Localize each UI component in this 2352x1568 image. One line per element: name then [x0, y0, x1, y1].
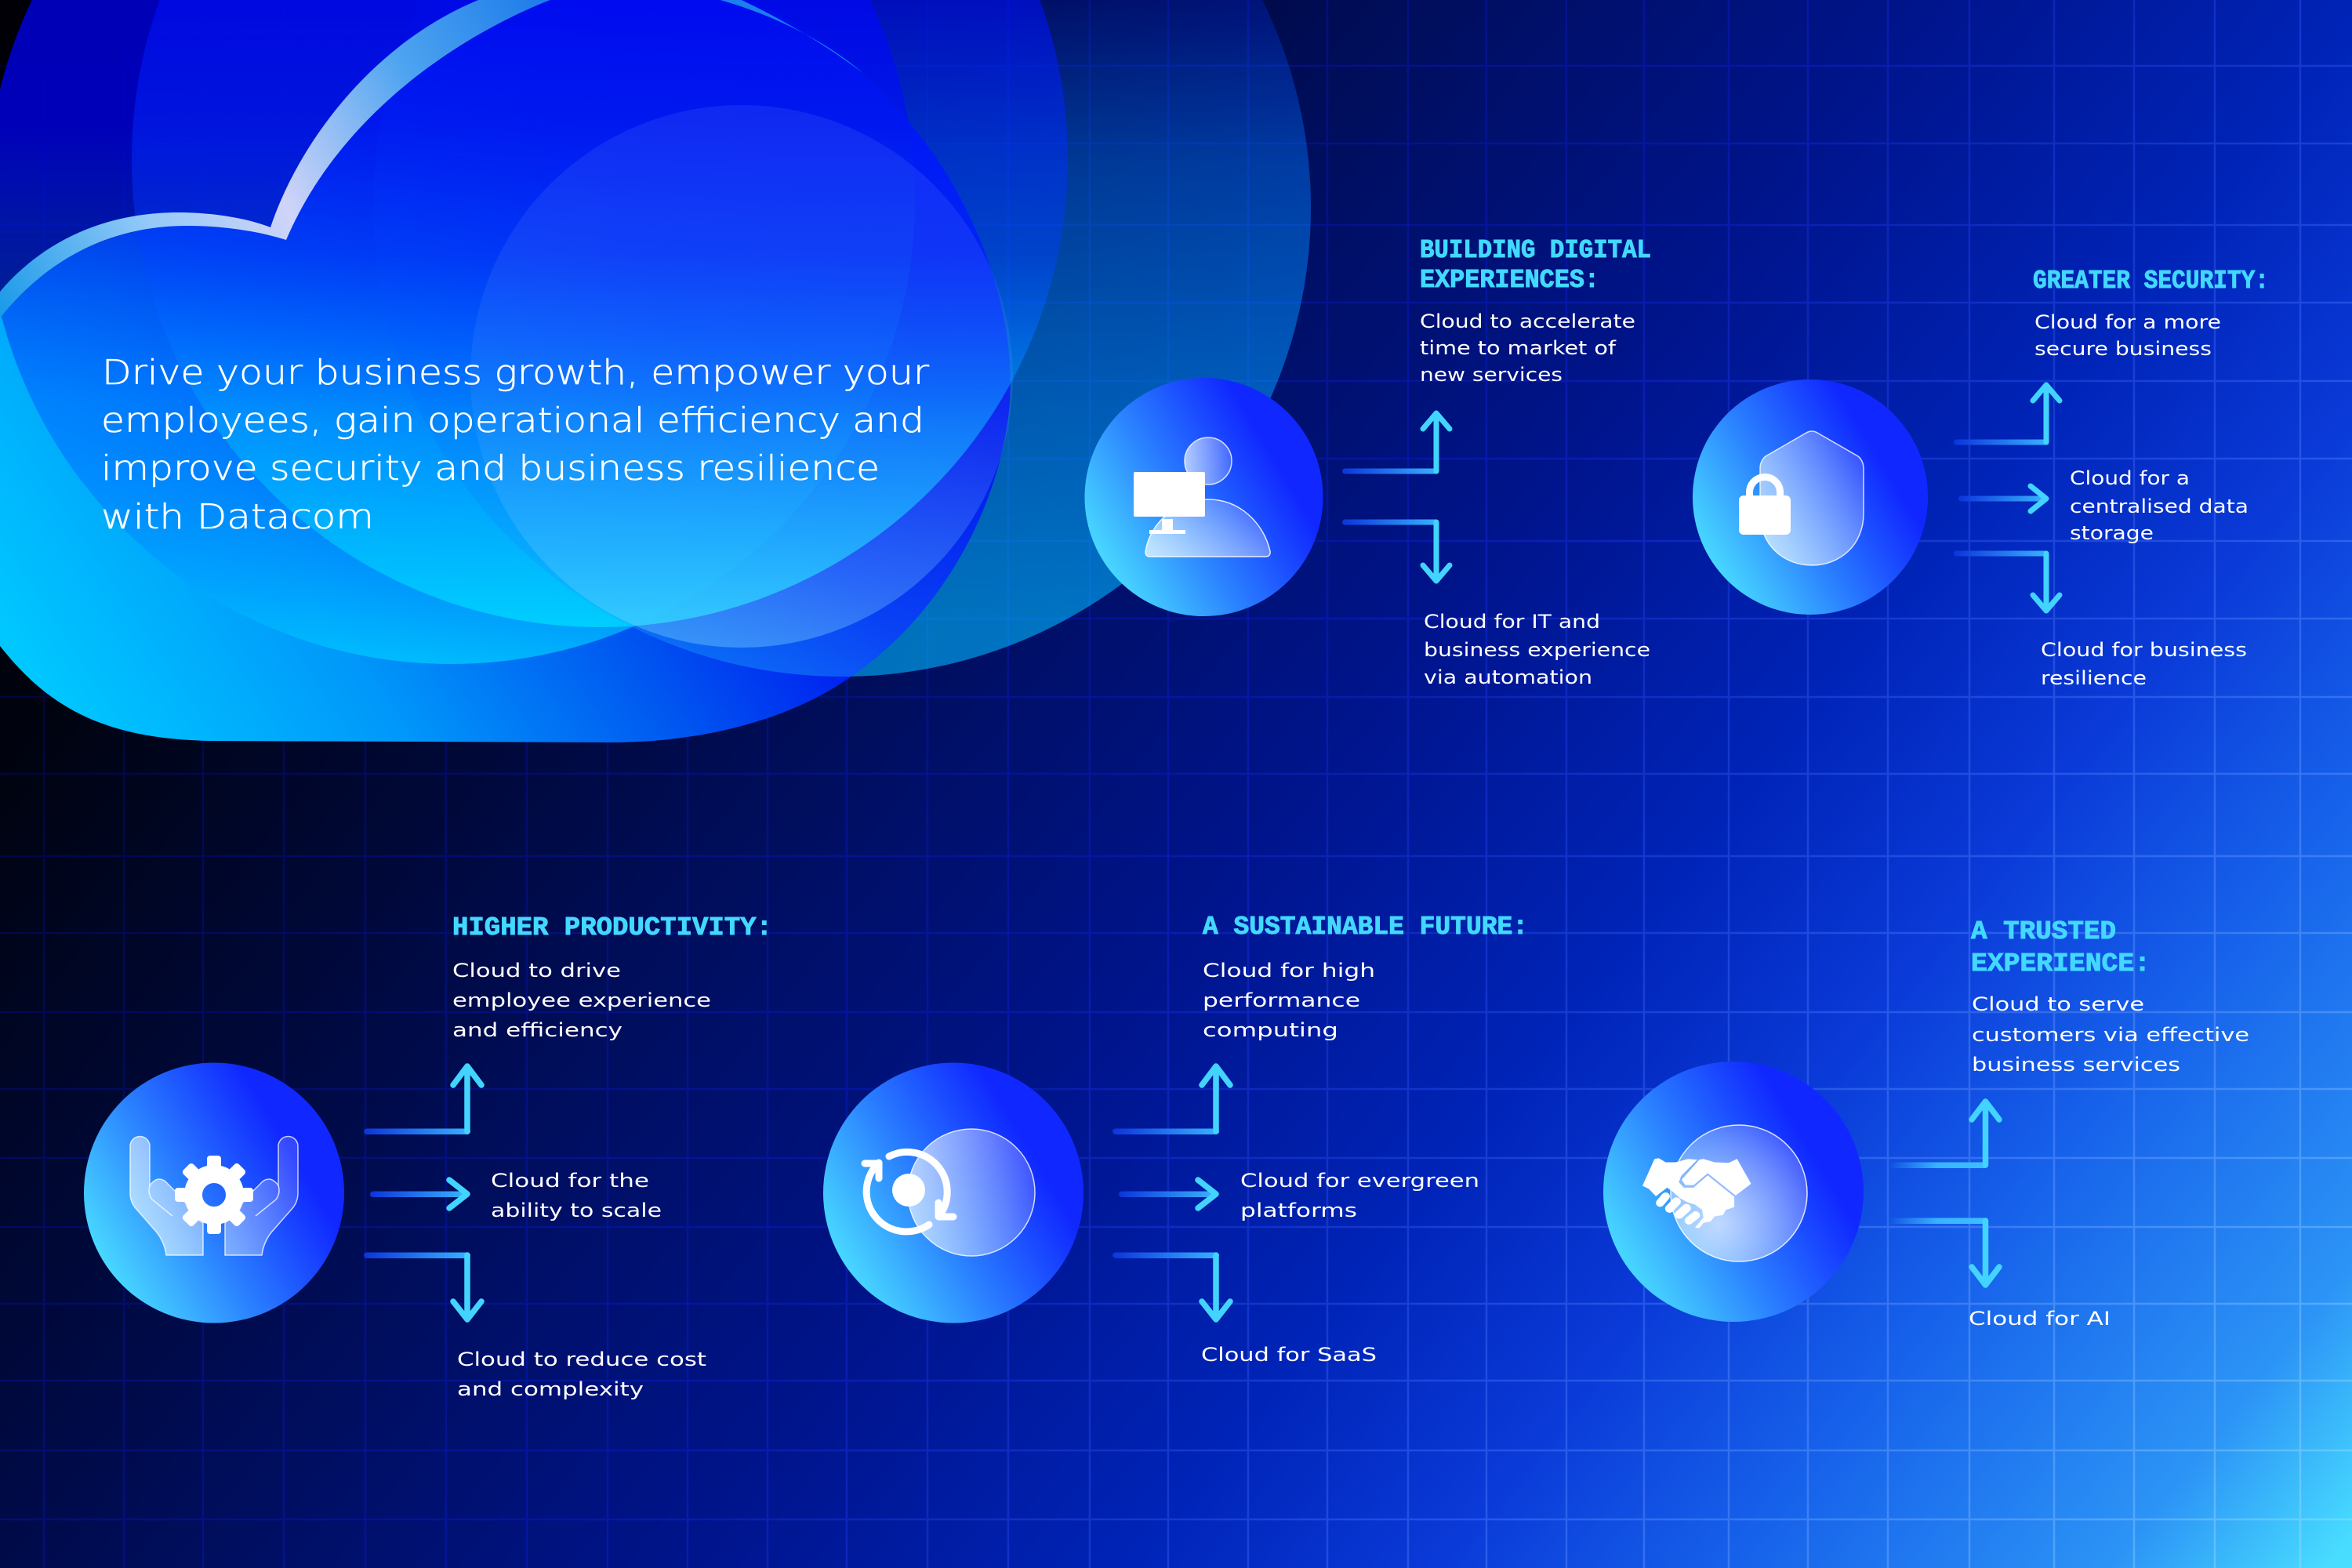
text: reduce cost	[457, 1348, 706, 1400]
text: resilience: Cloud for business	[2041, 639, 2247, 661]
heading: A TRUSTED	[1971, 917, 2116, 946]
text: accelerate: new services	[1420, 364, 1563, 386]
text: evergreen platforms: platforms	[1240, 1200, 1357, 1221]
text: automation: Cloud for IT and	[1424, 611, 1600, 633]
text: secure business: secure business	[2034, 338, 2212, 360]
headline: improve security and business resilience	[101, 448, 880, 488]
text: employee experience: Cloud to drive	[452, 960, 621, 982]
arrow up	[1954, 385, 2060, 445]
arrow right	[370, 1180, 467, 1208]
text: high performance computing	[1203, 960, 1375, 1041]
cloud highlight sliver	[706, 0, 864, 74]
headline	[101, 353, 930, 537]
icon: person at monitor	[1085, 378, 1323, 616]
heading	[1971, 917, 2151, 978]
heading: A SUSTAINABLE FUTURE:	[1203, 913, 1528, 942]
text: evergreen platforms	[1240, 1170, 1479, 1221]
cloud overlay circle middle	[132, 0, 1068, 627]
text: employee experience: employee experience	[452, 989, 711, 1011]
text: automation	[1424, 611, 1650, 688]
text: accelerate	[1420, 310, 1635, 386]
cloud back circle right	[373, 0, 1311, 677]
icon: hands holding gear	[84, 1063, 344, 1323]
arrow up	[364, 1066, 481, 1134]
cloud overlay circle right tint	[439, 384, 1010, 677]
text: automation: via automation	[1424, 666, 1592, 688]
arrow down	[364, 1253, 481, 1319]
heading: EXPERIENCES:	[1420, 266, 1599, 295]
heading: EXPERIENCE:	[1971, 949, 2151, 978]
panel: building digital experiences	[1085, 236, 1651, 688]
text: employee experience	[452, 960, 711, 1041]
icon: handshake	[1603, 1062, 1864, 1322]
text: reduce cost: and complexity	[457, 1378, 644, 1400]
text: cloud for ai: Cloud for AI	[1969, 1308, 2111, 1330]
text: ability to scale	[491, 1170, 662, 1221]
arrow down	[1954, 550, 2060, 611]
text: business services: business services	[1972, 1054, 2180, 1076]
text: business services: Cloud to serve	[1972, 993, 2144, 1015]
text: employee experience: and efficiency	[452, 1019, 622, 1041]
heading: GREATER SECURITY:	[2033, 267, 2269, 296]
arrow up	[1889, 1102, 1999, 1168]
text: high performance computing: performance	[1203, 989, 1360, 1011]
text: high performance computing: computing	[1203, 1019, 1338, 1041]
text: reduce cost: Cloud to reduce cost	[457, 1348, 706, 1370]
arrow right	[1119, 1180, 1216, 1208]
cloud highlight band	[0, 0, 596, 323]
arrow down	[1342, 519, 1450, 581]
panel: greater security	[1693, 267, 2269, 689]
cloud inner light circle	[470, 105, 1013, 648]
icon: shield and lock	[1693, 379, 1928, 615]
text: business services: customers via effective	[1972, 1024, 2249, 1046]
text: accelerate: Cloud to accelerate	[1420, 310, 1635, 332]
headline: with Datacom	[101, 497, 374, 537]
arrow up	[1342, 413, 1450, 474]
text: ability to scale: ability to scale	[491, 1200, 662, 1221]
icon: sync cycle	[823, 1063, 1083, 1323]
panel: higher productivity	[84, 913, 772, 1400]
text: evergreen platforms: Cloud for evergreen	[1240, 1170, 1479, 1192]
heading	[1420, 236, 1651, 295]
text: data storage: Cloud for a	[2070, 467, 2190, 489]
text: data storage: centralised data	[2070, 495, 2249, 517]
heading: HIGHER PRODUCTIVITY:	[452, 913, 772, 942]
cloud illustration	[0, 0, 1311, 742]
text: secure business	[2034, 311, 2221, 360]
text: automation: business experience	[1424, 639, 1650, 661]
panel: a sustainable future	[823, 913, 1528, 1366]
heading: BUILDING DIGITAL	[1420, 236, 1651, 265]
text: business services	[1972, 993, 2249, 1076]
text: data storage: storage	[2070, 522, 2154, 544]
cloud overlay circle left	[0, 0, 915, 664]
arrow up	[1112, 1066, 1230, 1134]
arrow down	[1112, 1253, 1230, 1319]
text: ability to scale: Cloud for the	[491, 1170, 649, 1192]
headline: Drive your business growth, empower your	[102, 353, 930, 393]
text: saas: Cloud for SaaS	[1201, 1344, 1377, 1366]
headline: employees, gain operational efficiency and	[101, 401, 924, 441]
text: resilience	[2041, 639, 2247, 689]
text: resilience: resilience	[2041, 667, 2147, 689]
cloud body	[0, 0, 1011, 742]
text: accelerate: time to market of	[1420, 337, 1617, 359]
arrow right	[1958, 486, 2046, 511]
panel: a trusted experience	[1603, 917, 2249, 1330]
text: secure business: Cloud for a more	[2034, 311, 2221, 333]
arrow down	[1889, 1218, 1999, 1285]
text: data storage	[2070, 467, 2249, 544]
text: high performance computing: Cloud for high	[1203, 960, 1375, 982]
